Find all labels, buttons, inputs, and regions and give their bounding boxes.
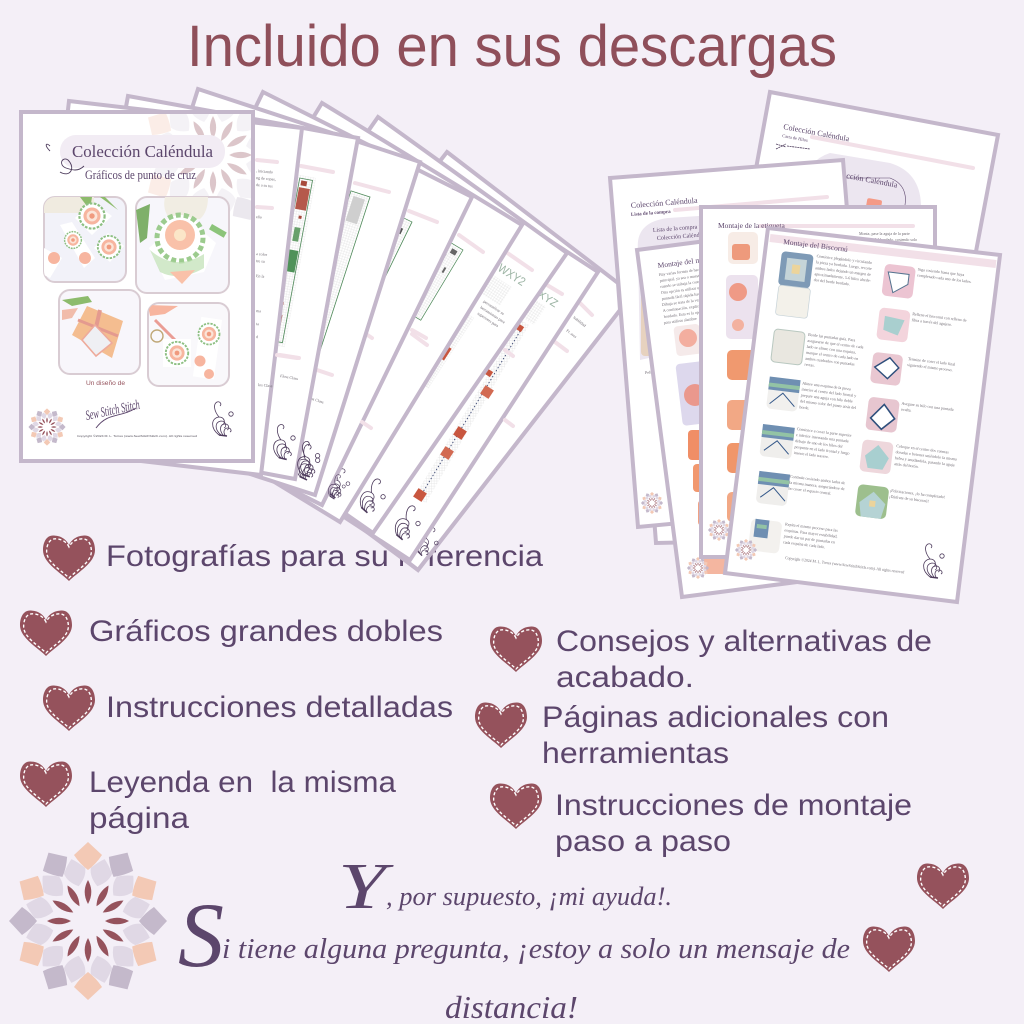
step text: Comience a coser la parte superior [796, 426, 853, 438]
label: designed by: Un diseño de [86, 381, 126, 387]
card title: cción Caléndula [846, 171, 899, 190]
chart strip [417, 310, 474, 388]
step text: doradas o botones uniéndolo la misma [895, 449, 957, 462]
page: tag assembly [701, 207, 935, 557]
title pill [60, 135, 225, 168]
step text: la pieza ya bordada. Luego, recorte [816, 259, 872, 272]
step text: ambos lados dejando un margen de [815, 265, 872, 277]
feature: assembly: Instrucciones de montaje [555, 789, 912, 822]
step text: borde. [799, 404, 810, 410]
step 5 photo [870, 352, 903, 386]
feature: tips: acabado. [556, 661, 694, 694]
signature flourish [96, 408, 136, 428]
chart letters XYZ: XYZ [535, 288, 560, 310]
step text: Repita el mismo proceso para las [785, 521, 839, 533]
feature: legend: página [89, 802, 189, 835]
step text: cada esquina de cada lado. [783, 539, 826, 549]
page 4 [93, 89, 420, 495]
page 2: los Class [258, 382, 273, 388]
step 6 photo [766, 376, 801, 412]
step text: Borde las puntadas guía. Para [808, 332, 856, 342]
page 5 [113, 92, 472, 505]
step text: pespunte en el lado frontal y luego [794, 444, 850, 456]
fan of chart pages [29, 89, 620, 570]
body text: Hay varias formas de hacer la [658, 266, 707, 277]
step text: rectas. [804, 362, 815, 368]
step text: del mismo color del punto atrás del [800, 398, 857, 410]
icon: heart 5 [490, 626, 542, 672]
photos [728, 232, 758, 264]
step text: atrás del botón. [894, 461, 919, 469]
photo: ornaments set [44, 197, 126, 282]
step text: Alinee una esquina de la pieza [802, 380, 851, 391]
photo: gift box [59, 290, 140, 374]
step text: Continúe cosiendo ambos lados de [790, 474, 846, 485]
chart with red and green blocks [266, 175, 316, 347]
page 2: d [256, 334, 258, 339]
body text: bordado. Esta es la opción [663, 309, 706, 319]
icon: heart 4 [20, 762, 72, 807]
chart [305, 212, 412, 402]
title: Incluido en sus descargas [187, 14, 837, 79]
heading: Montaje del marcapáginas [657, 251, 737, 270]
body text: puntada fácil rápida hacia [661, 291, 703, 301]
closing script message: Y [338, 850, 394, 923]
chart letters: WXY2 [495, 261, 528, 289]
body text: Dibuja se trata de la vez [661, 297, 701, 307]
page 3 [65, 96, 358, 479]
step text: fibra a través del agujero. [911, 317, 952, 327]
closing script message: i tiene alguna pregunta, ¡estoy a solo un mensaje de [222, 933, 850, 965]
body text: principal, ya sea o muestra [659, 272, 703, 284]
page 6 [140, 103, 522, 522]
feature: detailed instructions: Instrucciones detalladas [106, 691, 453, 724]
page 8 [214, 144, 598, 560]
step text: lado se alinee con una esquina, [806, 344, 856, 356]
page: biscornu assembly [725, 228, 1000, 602]
cover subheading: Gráficos de punto de cruz [85, 168, 196, 182]
page 3: Floss Class [280, 373, 299, 381]
page: bookmark assembly [637, 220, 912, 597]
page 7 [181, 117, 567, 533]
page 2: , iniciando [256, 168, 273, 175]
ornament [46, 144, 84, 174]
page 7: personalizar su [482, 299, 505, 316]
photo: keyring and bookmark [148, 303, 229, 386]
cover page [19, 110, 255, 463]
page: thread card [707, 92, 998, 479]
step 2 photo [881, 264, 916, 299]
page 10 [230, 157, 620, 570]
photo: biscornu [136, 197, 229, 293]
photos [673, 324, 703, 356]
step text: dor del borde bordado. [813, 277, 850, 286]
page 2: tre su [256, 258, 265, 264]
body text: cuando se trabaja la costura [659, 278, 704, 289]
step 12 photo [748, 518, 782, 554]
faint mandala [148, 114, 251, 220]
step 3 photo [876, 307, 911, 343]
feature: extra pages [542, 701, 889, 770]
step 9 photo [859, 439, 894, 475]
step photos [746, 251, 916, 566]
page 2 [29, 101, 302, 475]
icon: heart lower right [863, 926, 915, 972]
step text: Termine de coser el lado final [908, 356, 956, 367]
step text: ¡Disfrute de su biscornú! [889, 494, 929, 503]
page 2: ma [256, 308, 261, 313]
step text: la misma manera, asegurándose de [789, 480, 845, 492]
closing script message [178, 850, 850, 1024]
heading: Colección Caléndula [630, 196, 698, 210]
thread card outline [795, 153, 921, 240]
subheading: Lista de la compra [631, 210, 671, 218]
feature list: right column [475, 625, 932, 858]
step text: Rellene el biscornú con relleno de [912, 311, 967, 323]
small mandala logo [28, 408, 66, 446]
list card [638, 212, 775, 360]
page 9: habilidad [572, 315, 587, 328]
feature: large charts: Gráficos grandes dobles [89, 615, 443, 648]
body text [658, 266, 707, 325]
closing script message: S [178, 884, 224, 986]
feature: assembly [555, 789, 912, 858]
icon: heart top right [917, 864, 969, 909]
logo [735, 539, 757, 561]
page 2: de a su tus [256, 182, 274, 188]
chart grid [478, 273, 512, 306]
step text: Coloque en el centro dos cuentas [896, 443, 950, 455]
icon: heart 2 [20, 610, 72, 656]
feature: tips: Consejos y alternativas de [556, 625, 932, 658]
step text: ambos cuadrados con puntadas [805, 356, 855, 367]
cover heading: Colección Caléndula [72, 142, 213, 161]
feature: photographs: Fotografías para su referencia [106, 540, 543, 573]
page: shopping list: Pefi [645, 369, 652, 375]
page 7: superiores para [476, 311, 500, 328]
feature list: left column [20, 536, 543, 835]
step text: ¡Felicitaciones, ¡lo ha completado! [890, 488, 946, 500]
chart [297, 191, 370, 363]
step text: interior al centro del lado frontal y [801, 386, 857, 398]
icon: scissors [776, 144, 810, 149]
feature: legend [89, 766, 396, 835]
icon: swirl [213, 402, 233, 436]
page 9: Fr. ases [565, 328, 578, 339]
heading: Montaje de la etiqueta [718, 221, 786, 230]
page: tag assembly: Monta, pase la aguja de la parte [859, 231, 910, 237]
step text: siguiendo el mismo proceso. [907, 362, 953, 372]
step 8 photo [759, 424, 795, 460]
step text: marque el centro de cada lado en [806, 350, 859, 361]
page: shopping list: Lista de la compra para [653, 224, 710, 234]
feature: legend: Leyenda en la misma [89, 766, 396, 799]
page: tag assembly: posterior del bordado, cosiendo solo [859, 237, 917, 243]
closing script message: distancia! [445, 989, 578, 1024]
step text: inserte el lado trasero. [794, 450, 829, 459]
step text [782, 253, 979, 564]
page 2: ng de copas, [256, 175, 276, 183]
step 4 photo [771, 329, 805, 365]
step 11 photo [855, 484, 889, 519]
page 2: a color [256, 251, 268, 257]
thread swatch [865, 198, 882, 216]
feature: extra pages: herramientas [542, 737, 729, 770]
step text: oculta. [901, 406, 912, 413]
page 9: tres [487, 417, 495, 425]
step text: Asegure su hilo con una puntada [901, 401, 954, 412]
icon: heart 6 [475, 702, 527, 748]
closing script message: , por supuesto, ¡mi ayuda!. [386, 882, 672, 911]
step 7 photo [865, 397, 900, 433]
step 1 chart photo [774, 251, 815, 319]
step text: aproximadamente, 5-6 hilos alrede- [814, 271, 872, 284]
body text: para utilizar alambre [663, 316, 697, 325]
page 4: Floss Class [306, 394, 325, 405]
photo sliver [641, 276, 655, 356]
signature: Sew Stitch Stitch [84, 398, 141, 424]
right stack of assembly pages [610, 92, 1000, 602]
step text: prepare una aguja con hilo doble [801, 392, 853, 404]
page: shopping list [610, 160, 871, 527]
chart strip with red motifs [413, 320, 529, 503]
icon: heart 7 [490, 784, 542, 829]
page: back sheet corner [645, 400, 800, 543]
heading: Montaje del Biscornú [783, 237, 849, 254]
copyright: Copyright ©2024 M. L. Torres (www.SewStitchStitch.com). All rights reserved [77, 434, 197, 438]
page 2: ta [256, 321, 259, 326]
page: shopping list: Colección Caléndula [657, 232, 707, 242]
step text: no coser el espacio central. [788, 486, 832, 496]
icon: swirl [924, 544, 944, 578]
step text: Siga cosiendo hasta que haya [918, 267, 965, 277]
icon: heart 3 [43, 686, 95, 731]
body text: Otra opción es utilizar una [660, 285, 703, 295]
step text: esquinas. Para mayor estabilidad, [784, 527, 838, 540]
copyright: Copyright ©2024 M. L. Torres (www.SewStitchStitch.com). All rights reserved [785, 555, 905, 574]
page 7: herramientas para [479, 305, 506, 325]
step text: asegurarse de que el centro de cada [807, 338, 864, 350]
mandala logo [9, 842, 167, 1000]
step 10 photo [756, 471, 790, 506]
step text: debajo de uno de los hilos del [795, 438, 844, 449]
page 2: eño [256, 214, 262, 220]
step text: Comience plegándolo y circulando [816, 253, 872, 265]
feature: tips [556, 625, 932, 694]
chart [405, 241, 463, 320]
page subheading: Carta de Hilos [782, 133, 809, 143]
page 2: En la [256, 273, 265, 279]
step text: e inferior insertando una puntada [796, 432, 849, 443]
feature: extra pages: Páginas adicionales con [542, 701, 889, 734]
icon: heart 1 [43, 536, 95, 581]
step text: completado cada uno de los lados. [917, 272, 972, 284]
page 9 [233, 152, 620, 570]
page heading: Colección Caléndula [783, 122, 850, 143]
step text: hebra y anudándola, pasando la aguja [895, 455, 955, 468]
feature: assembly: paso a paso [555, 825, 731, 858]
step text: puede dar un par de puntadas en [783, 533, 835, 544]
pink heading band [770, 238, 996, 264]
body text: A continuación, explicaré [662, 303, 704, 314]
